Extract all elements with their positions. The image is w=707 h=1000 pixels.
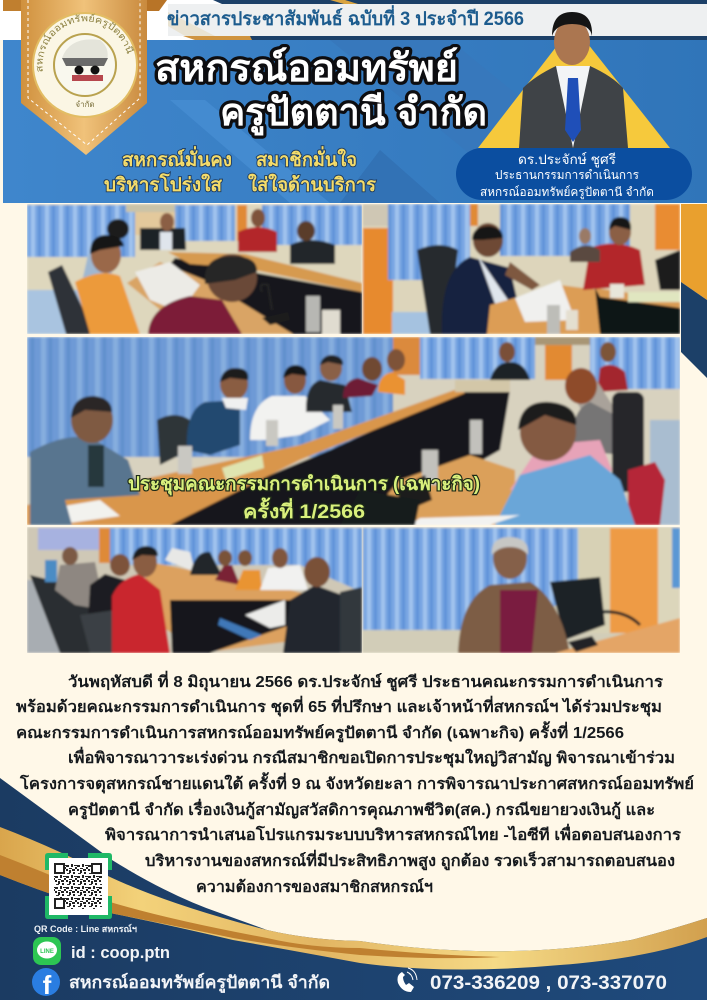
chairman name pill: ประธานกรรมการดำเนินการ [495, 168, 639, 182]
article body text: วันพฤหัสบดี ที่ 8 มิถุนายน 2566 ดร.ประจักษ์ ชูศรี ประธานคณะกรรมการดำเนินการ [68, 670, 664, 693]
header [0, 0, 707, 203]
article body text: เพื่อพิจารณาวาระเร่งด่วน กรณีสมาชิกขอเปิดการประชุมใหญ่วิสามัญ พิจารณาเข้าร่วม [68, 746, 675, 768]
photo 5: seated member [362, 527, 680, 653]
title: ครูปัตตานี จำกัด [220, 92, 487, 136]
article body text: พิจารณาการนำเสนอโปรแกรมระบบบริหารสหกรณ์ไทย -ไอซีที เพื่อตอบสนองการ [105, 823, 682, 844]
article body text: ครูปัตตานี จำกัด เรื่องเงินกู้สามัญสวัสดิการคุณภาพชีวิต(สค.) กรณีขยายวงเงินกู้ และ [68, 798, 655, 821]
right side decoration [681, 204, 707, 378]
article body text: โครงการจตุสหกรณ์ชายแดนใต้ ครั้งที่ 9 ณ จังหวัดยะลา การพิจารณาประกาศสหกรณ์ออมทรัพย์ [19, 772, 694, 794]
QR code [45, 853, 112, 919]
icon: LINE: LINE [40, 949, 54, 955]
blue panel [3, 40, 707, 203]
article body text: พร้อมด้วยคณะกรรมการดำเนินการ ชุดที่ 65 ที่ปรึกษา และเจ้าหน้าที่สหกรณ์ฯ ได้ร่วมประชุม [16, 695, 662, 717]
chairman name pill: สหกรณ์ออมทรัพย์ครูปัตตานี จำกัด [480, 185, 654, 200]
ribbon badge [21, 0, 147, 155]
QR caption: QR Code : Line สหกรณ์ฯ [34, 923, 137, 934]
article body text: ความต้องการของสมาชิกสหกรณ์ฯ [196, 878, 433, 896]
title [155, 47, 487, 136]
footer wave background [0, 778, 707, 1000]
meeting caption [128, 474, 480, 523]
meeting caption: ครั้งที่ 1/2566 [243, 497, 365, 523]
cooperative logo: จำกัด [75, 100, 95, 109]
chairman name pill [456, 148, 692, 200]
photo 4: round table view [27, 527, 362, 653]
ribbon corners [3, 0, 21, 11]
cooperative logo [32, 12, 138, 118]
icon: Facebook: f [43, 970, 52, 1000]
chairman portrait [478, 12, 670, 148]
slogans: ใส่ใจด้านบริการ [248, 173, 377, 196]
newsletter heading: ข่าวสารประชาสัมพันธ์ ฉบับที่ 3 ประจำปี 2566 [167, 5, 524, 30]
article body text [16, 670, 694, 896]
slogans [104, 146, 377, 196]
article body text: คณะกรรมการดำเนินการสหกรณ์ออมทรัพย์ครูปัตตานี จำกัด (เฉพาะกิจ) ครั้งที่ 1/2566 [16, 721, 624, 744]
meeting caption: ประชุมคณะกรรมการดำเนินการ (เฉพาะกิจ) [128, 474, 480, 496]
photo 1: meeting table left view [27, 204, 362, 334]
Facebook name: สหกรณ์ออมทรัพย์ครูปัตตานี จำกัด [69, 972, 330, 994]
photo 3: long meeting table with caption [27, 337, 680, 525]
slogans: สหกรณ์มั่นคง [122, 146, 232, 171]
top band [0, 0, 707, 40]
slogans: บริหารโปร่งใส [104, 173, 222, 196]
icon: Facebook [32, 968, 60, 1000]
LINE id: id : coop.ptn [71, 943, 170, 962]
cooperative logo: สหกรณ์ออมทรัพย์ครูปัตตานี [36, 14, 134, 72]
phone numbers: 073-336209 , 073-337070 [430, 973, 667, 994]
chairman name pill: ดร.ประจักษ์ ชูศรี [518, 151, 616, 168]
icon: phone [398, 968, 417, 992]
title: สหกรณ์ออมทรัพย์ [155, 47, 458, 90]
slogans: สมาชิกมั่นใจ [256, 146, 357, 171]
icon: LINE [33, 937, 61, 965]
article body text: บริหารงานของสหกรณ์ที่มีประสิทธิภาพสูง ถูกต้อง รวดเร็วสามารถตอบสนอง [145, 849, 675, 872]
photo 2: chairman at table [362, 204, 680, 334]
